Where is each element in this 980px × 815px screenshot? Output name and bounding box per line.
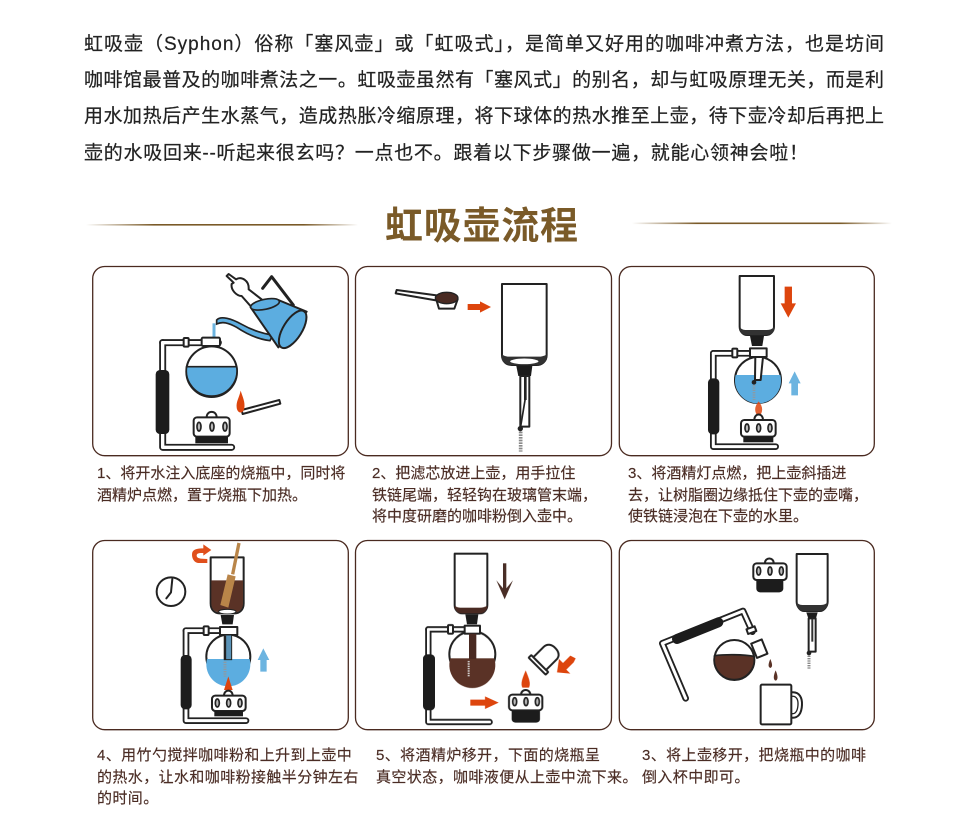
heading: syphon process: 虹吸壶流程: [385, 206, 578, 248]
caption: step 1: 1、将开水注入底座的烧瓶中，同时将: [97, 465, 345, 482]
panel: step 2 illustration: [356, 266, 612, 456]
icon: rotate arrow: [192, 544, 211, 563]
intro paragraph: 虹吸壶（Syphon）俗称「塞风壶」或「虹吸式」，是简单又好用的咖啡冲煮方法，也是坊间: [84, 33, 884, 55]
icon: tilted stand: [662, 611, 756, 698]
caption: step 2: [372, 464, 597, 525]
arrow: red down: [781, 287, 796, 318]
caption: step 4: [97, 746, 359, 807]
caption: step 6: [642, 746, 866, 786]
caption: step 6: 3、将上壶移开，把烧瓶中的咖啡: [642, 746, 866, 764]
panel: step 1 illustration: [93, 266, 348, 456]
icon: stand: [708, 349, 776, 447]
icon: upper vessel removed: [797, 554, 828, 670]
icon: flask with water: [206, 627, 250, 686]
caption: step 3: 3、将酒精灯点燃，把上壶斜插进: [628, 464, 846, 482]
arrow: red diagonal: [557, 656, 576, 674]
icon: burner removed: [753, 558, 787, 592]
icon: stand: [181, 626, 246, 721]
icon: flask with water: [186, 346, 237, 397]
icon: lit match: [237, 391, 280, 414]
icon: stand: [156, 338, 232, 447]
caption: step 4: 的热水，让水和咖啡粉接触半分钟左右: [97, 769, 359, 786]
arrow: blue up: [789, 371, 801, 395]
caption: step 3: [628, 464, 868, 525]
intro paragraph: [84, 33, 884, 164]
panel: step 4 illustration: [93, 540, 348, 730]
caption: step 2: 2、把滤芯放进上壶，用手拉住: [372, 464, 575, 482]
arrow: dark down: [496, 563, 513, 599]
intro paragraph: 壶的水吸回来--听起来很玄吗？一点也不。跟着以下步骤做一遍，就能心领神会啦！: [84, 142, 808, 164]
arrow: red right: [468, 301, 491, 313]
caption: step 5: 真空状态，咖啡液便从上壶中流下来。: [376, 768, 638, 786]
panel: step 6 illustration: [619, 540, 874, 730]
icon: burner: [194, 412, 230, 443]
icon: stand: [423, 625, 490, 722]
icon: water stream: [209, 323, 218, 364]
icon: upper vessel with filter: [502, 284, 547, 452]
caption: step 3: 去，让树脂圈边缘抵住下壶的壶嘴，: [628, 486, 868, 504]
caption: step 1: 酒精炉点燃，置于烧瓶下加热。: [97, 486, 307, 504]
caption: step 5: [376, 747, 638, 786]
icon: burner with flame: [741, 401, 776, 442]
icon: upper vessel with coffee and stirrer: [211, 543, 244, 624]
icon: snuffer cap: [529, 640, 564, 675]
icon: flask with coffee: [449, 626, 495, 688]
intro paragraph: 用水加热后产生水蒸气，造成热胀冷缩原理，将下球体的热水推至上壶，待下壶冷却后再把上: [84, 105, 884, 127]
caption: step 5: 5、将酒精炉移开，下面的烧瓶呈: [376, 747, 600, 764]
panel: step 5 illustration: [356, 540, 612, 730]
caption: step 6: 倒入杯中即可。: [642, 769, 750, 786]
icon: flask with coffee: [714, 639, 767, 680]
caption: step 3: 使铁链浸泡在下壶的水里。: [628, 507, 808, 525]
icon: coffee scoop: [396, 290, 458, 309]
intro paragraph: 咖啡馆最普及的咖啡煮法之一。虹吸壶虽然有「塞风式」的别名，却与虹吸原理无关，而是利: [84, 69, 884, 91]
caption: step 4: 的时间。: [97, 790, 159, 807]
caption: step 4: 4、用竹勺搅拌咖啡粉和上升到上壶中: [97, 746, 352, 764]
icon: burner with flame: [509, 670, 542, 723]
icon: flask with water: [735, 348, 781, 403]
icon: kettle pouring water: [217, 274, 312, 352]
icon: clock: [157, 577, 185, 606]
caption: step 1: [97, 465, 345, 504]
caption: step 2: 将中度研磨的咖啡粉倒入壶中。: [372, 507, 582, 525]
arrow: red right: [470, 696, 499, 709]
icon: upper vessel: [740, 276, 774, 346]
panel: step 3 illustration: [619, 266, 874, 456]
icon: coffee drops: [769, 659, 778, 681]
icon: mug: [761, 685, 802, 724]
arrow: blue up: [258, 648, 269, 672]
caption: step 2: 铁链尾端，轻轻钩在玻璃管末端，: [372, 487, 597, 504]
icon: burner with flame: [212, 676, 246, 716]
icon: upper vessel: [455, 554, 487, 624]
